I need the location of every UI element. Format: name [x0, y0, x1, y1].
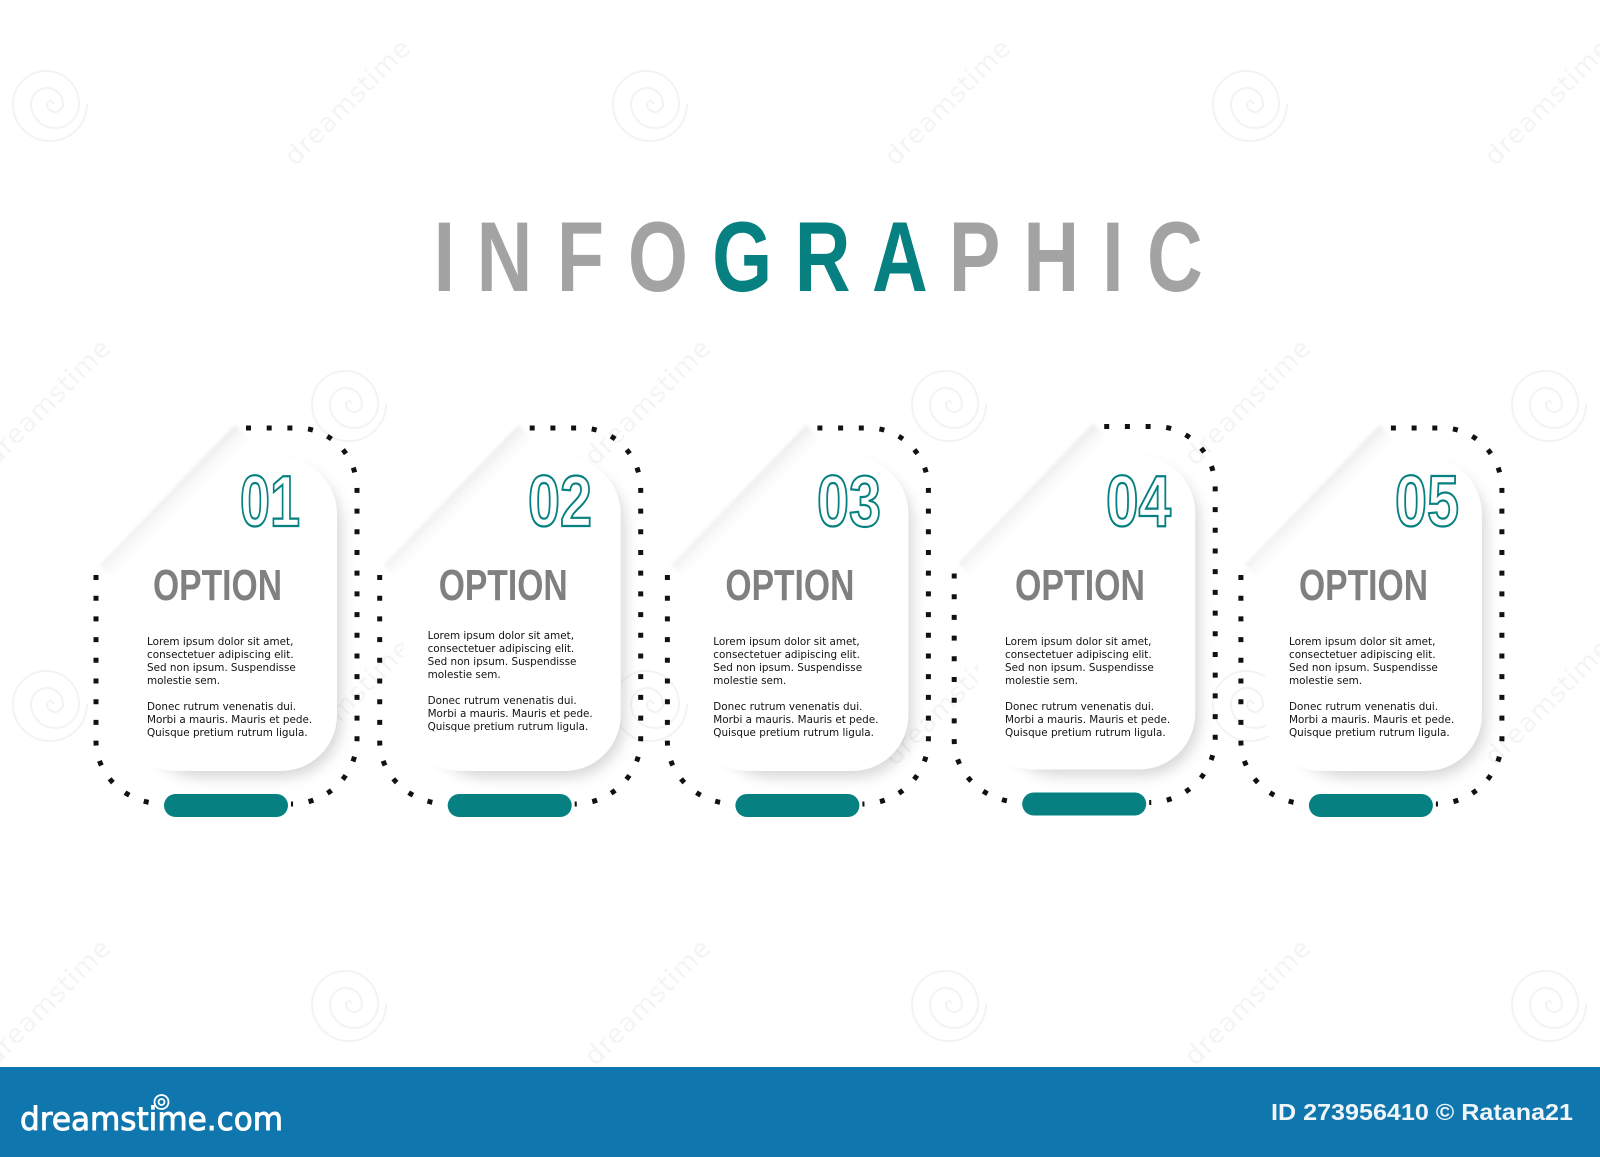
text block: option 02: consectetuer adipiscing elit.: [428, 643, 574, 655]
text block: option 03: Morbi a mauris. Mauris et pede.: [713, 714, 878, 726]
text block: option 03: Quisque pretium rutrum ligula.: [713, 727, 874, 739]
text block: option 03: molestie sem.: [713, 675, 786, 687]
text block: option 05: consectetuer adipiscing elit.: [1289, 649, 1436, 661]
text block: option 02: Donec rutrum venenatis dui.: [428, 695, 577, 707]
title: I: [1102, 202, 1124, 312]
text block: option 01: consectetuer adipiscing elit.: [147, 649, 294, 661]
text block: option 04: Quisque pretium rutrum ligula.: [1005, 727, 1166, 739]
title: C: [1147, 202, 1203, 312]
text block: option 05: [1289, 636, 1454, 739]
text block: option 04: consectetuer adipiscing elit.: [1005, 649, 1152, 661]
number 04: 04: [1106, 462, 1171, 542]
heading: option 04: OPTION: [1015, 561, 1145, 610]
heading: option 05: OPTION: [1299, 561, 1428, 610]
icon: spiral: [154, 1095, 168, 1109]
text block: option 04: Morbi a mauris. Mauris et pede.: [1005, 714, 1170, 726]
panel: option 03: [667, 425, 928, 817]
panel: option 01: [96, 425, 357, 817]
title: F: [557, 202, 604, 312]
watermark pattern: dreamstime: [879, 633, 1018, 772]
heading: option 03: OPTION: [725, 561, 854, 610]
footer credit: ID 273956410 © Ratana21: [1271, 1099, 1573, 1125]
title: [434, 202, 1203, 312]
title: I: [434, 202, 455, 312]
text block: option 05: Lorem ipsum dolor sit amet,: [1289, 636, 1435, 648]
text block: option 03: [713, 636, 878, 739]
text block: option 04: Donec rutrum venenatis dui.: [1005, 701, 1154, 713]
watermark pattern: dreamstime: [879, 33, 1018, 172]
text block: option 05: Quisque pretium rutrum ligula.: [1289, 727, 1450, 739]
panel: option 02: [380, 425, 641, 817]
text block: option 03: Donec rutrum venenatis dui.: [713, 701, 862, 713]
title: N: [477, 202, 532, 312]
panel: option 05: [1241, 425, 1502, 817]
text block: option 04: Sed non ipsum. Suspendisse: [1005, 662, 1154, 674]
text block: option 01: Donec rutrum venenatis dui.: [147, 701, 296, 713]
text block: option 05: molestie sem.: [1289, 675, 1362, 687]
text block: option 02: Sed non ipsum. Suspendisse: [428, 656, 576, 668]
heading: option 01: OPTION: [153, 561, 282, 610]
text block: option 05: Morbi a mauris. Mauris et pede.: [1289, 714, 1454, 726]
text block: option 01: Morbi a mauris. Mauris et pede.: [147, 714, 312, 726]
text block: option 04: Lorem ipsum dolor sit amet,: [1005, 636, 1151, 648]
text block: option 01: Sed non ipsum. Suspendisse: [147, 662, 296, 674]
text block: option 03: Lorem ipsum dolor sit amet,: [713, 636, 860, 648]
number 03: 03: [817, 462, 881, 542]
watermark pattern: dreamstime: [1179, 333, 1318, 472]
watermark pattern: dreamstime: [579, 333, 718, 472]
title: P: [949, 202, 1000, 312]
number 05: 05: [1395, 462, 1459, 542]
text block: option 04: molestie sem.: [1005, 675, 1078, 687]
watermark pattern: dreamstime: [1179, 933, 1318, 1072]
text block: option 05: Sed non ipsum. Suspendisse: [1289, 662, 1438, 674]
title: H: [1023, 202, 1079, 312]
text block: option 01: [147, 636, 312, 739]
text block: option 05: Donec rutrum venenatis dui.: [1289, 701, 1438, 713]
text block: option 02: [428, 630, 593, 733]
text block: option 01: Quisque pretium rutrum ligula.: [147, 727, 308, 739]
title: O: [628, 202, 688, 312]
text block: option 02: molestie sem.: [428, 669, 501, 681]
text block: option 01: molestie sem.: [147, 675, 220, 687]
heading: option 02: OPTION: [439, 561, 568, 610]
text block: option 02: Morbi a mauris. Mauris et pede.: [428, 708, 593, 720]
footer logo: dreamstime.com: [20, 1100, 283, 1138]
title: G: [712, 202, 772, 312]
text block: option 02: Lorem ipsum dolor sit amet,: [428, 630, 574, 642]
number 02: 02: [528, 462, 592, 542]
number 01: 01: [240, 462, 300, 542]
text block: option 03: consectetuer adipiscing elit.: [713, 649, 860, 661]
watermark pattern: dreamstime: [579, 933, 718, 1072]
title: A: [872, 202, 928, 312]
watermark pattern: dreamstime: [279, 633, 418, 772]
text block: option 01: Lorem ipsum dolor sit amet,: [147, 636, 293, 648]
text block: option 03: Sed non ipsum. Suspendisse: [713, 662, 862, 674]
panel: option 04: [954, 424, 1215, 816]
text block: option 04: [1005, 636, 1170, 739]
watermark pattern: dreamstime: [279, 33, 418, 172]
title: R: [795, 202, 851, 312]
text block: option 02: Quisque pretium rutrum ligula.: [428, 721, 588, 733]
footer bar: [0, 1067, 1600, 1157]
